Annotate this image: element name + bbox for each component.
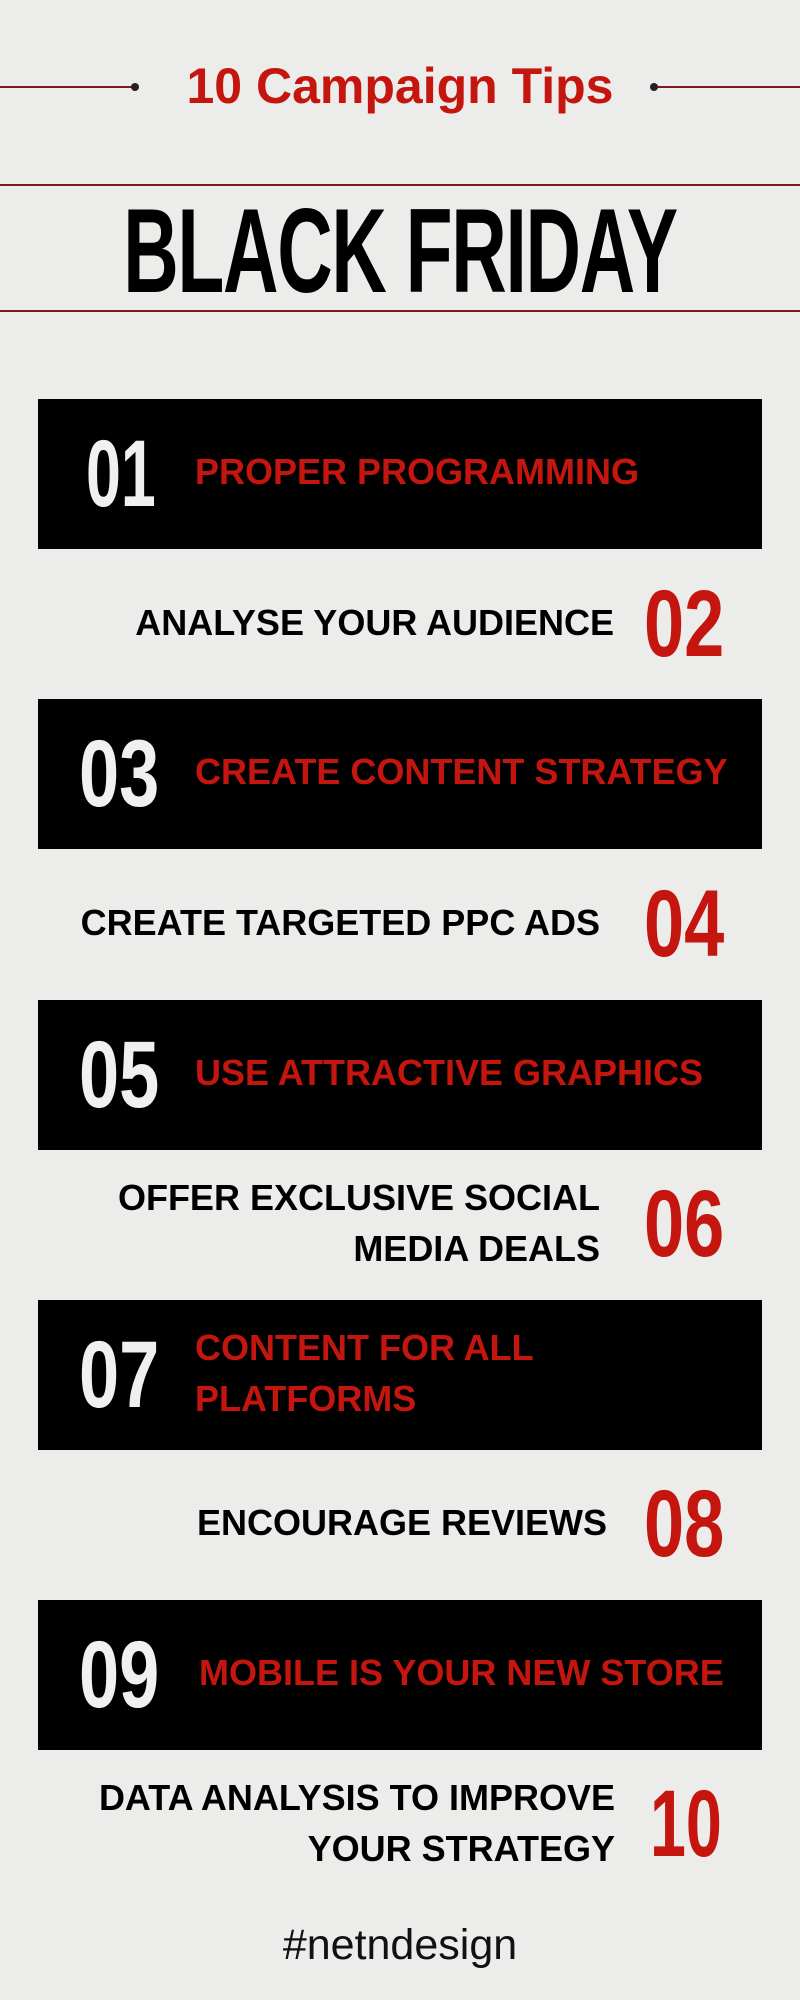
- tip 02: ANALYSE YOUR AUDIENCE: [135, 602, 614, 643]
- tip 10: YOUR STRATEGY: [308, 1828, 615, 1869]
- tip 07: PLATFORMS: [195, 1378, 416, 1419]
- tip 03: 03: [79, 721, 159, 827]
- tip 08: 08: [644, 1471, 724, 1577]
- subtitle: 10 Campaign Tips: [186, 58, 613, 114]
- tip 02: [135, 571, 724, 677]
- header rule left: [0, 86, 134, 88]
- tip 03: [38, 699, 762, 849]
- tip 02: 02: [644, 571, 724, 677]
- tip 07: 07: [79, 1322, 159, 1428]
- tip 03: CREATE CONTENT STRATEGY: [195, 751, 728, 792]
- tip 10: DATA ANALYSIS TO IMPROVE: [99, 1777, 615, 1818]
- tip 06: MEDIA DEALS: [353, 1228, 600, 1269]
- tip 08: [197, 1471, 724, 1577]
- tip 01: PROPER PROGRAMMING: [195, 451, 639, 492]
- tip 06: OFFER EXCLUSIVE SOCIAL: [118, 1177, 600, 1218]
- tip 06: 06: [644, 1171, 724, 1277]
- tip 09: 09: [79, 1622, 159, 1728]
- tip 07: CONTENT FOR ALL: [195, 1327, 534, 1368]
- tip 07: [38, 1300, 762, 1450]
- tip 01: 01: [86, 421, 156, 527]
- tip 09: MOBILE IS YOUR NEW STORE: [199, 1652, 724, 1693]
- header rule right: [653, 86, 800, 88]
- tip 10: [99, 1771, 722, 1877]
- tip 08: ENCOURAGE REVIEWS: [197, 1502, 607, 1543]
- tip 05: USE ATTRACTIVE GRAPHICS: [195, 1052, 703, 1093]
- tip 05: 05: [79, 1022, 159, 1128]
- tip 10: 10: [650, 1771, 722, 1877]
- title: BLACK FRIDAY: [123, 184, 677, 318]
- tip 04: 04: [644, 871, 724, 977]
- hashtag: #netndesign: [283, 1921, 517, 1969]
- tip 05: [38, 1000, 762, 1150]
- tip 01: [38, 399, 762, 549]
- tip 09: [38, 1600, 762, 1750]
- tip 04: CREATE TARGETED PPC ADS: [81, 902, 600, 943]
- tip 06: [118, 1171, 724, 1277]
- tip 04: [81, 871, 724, 977]
